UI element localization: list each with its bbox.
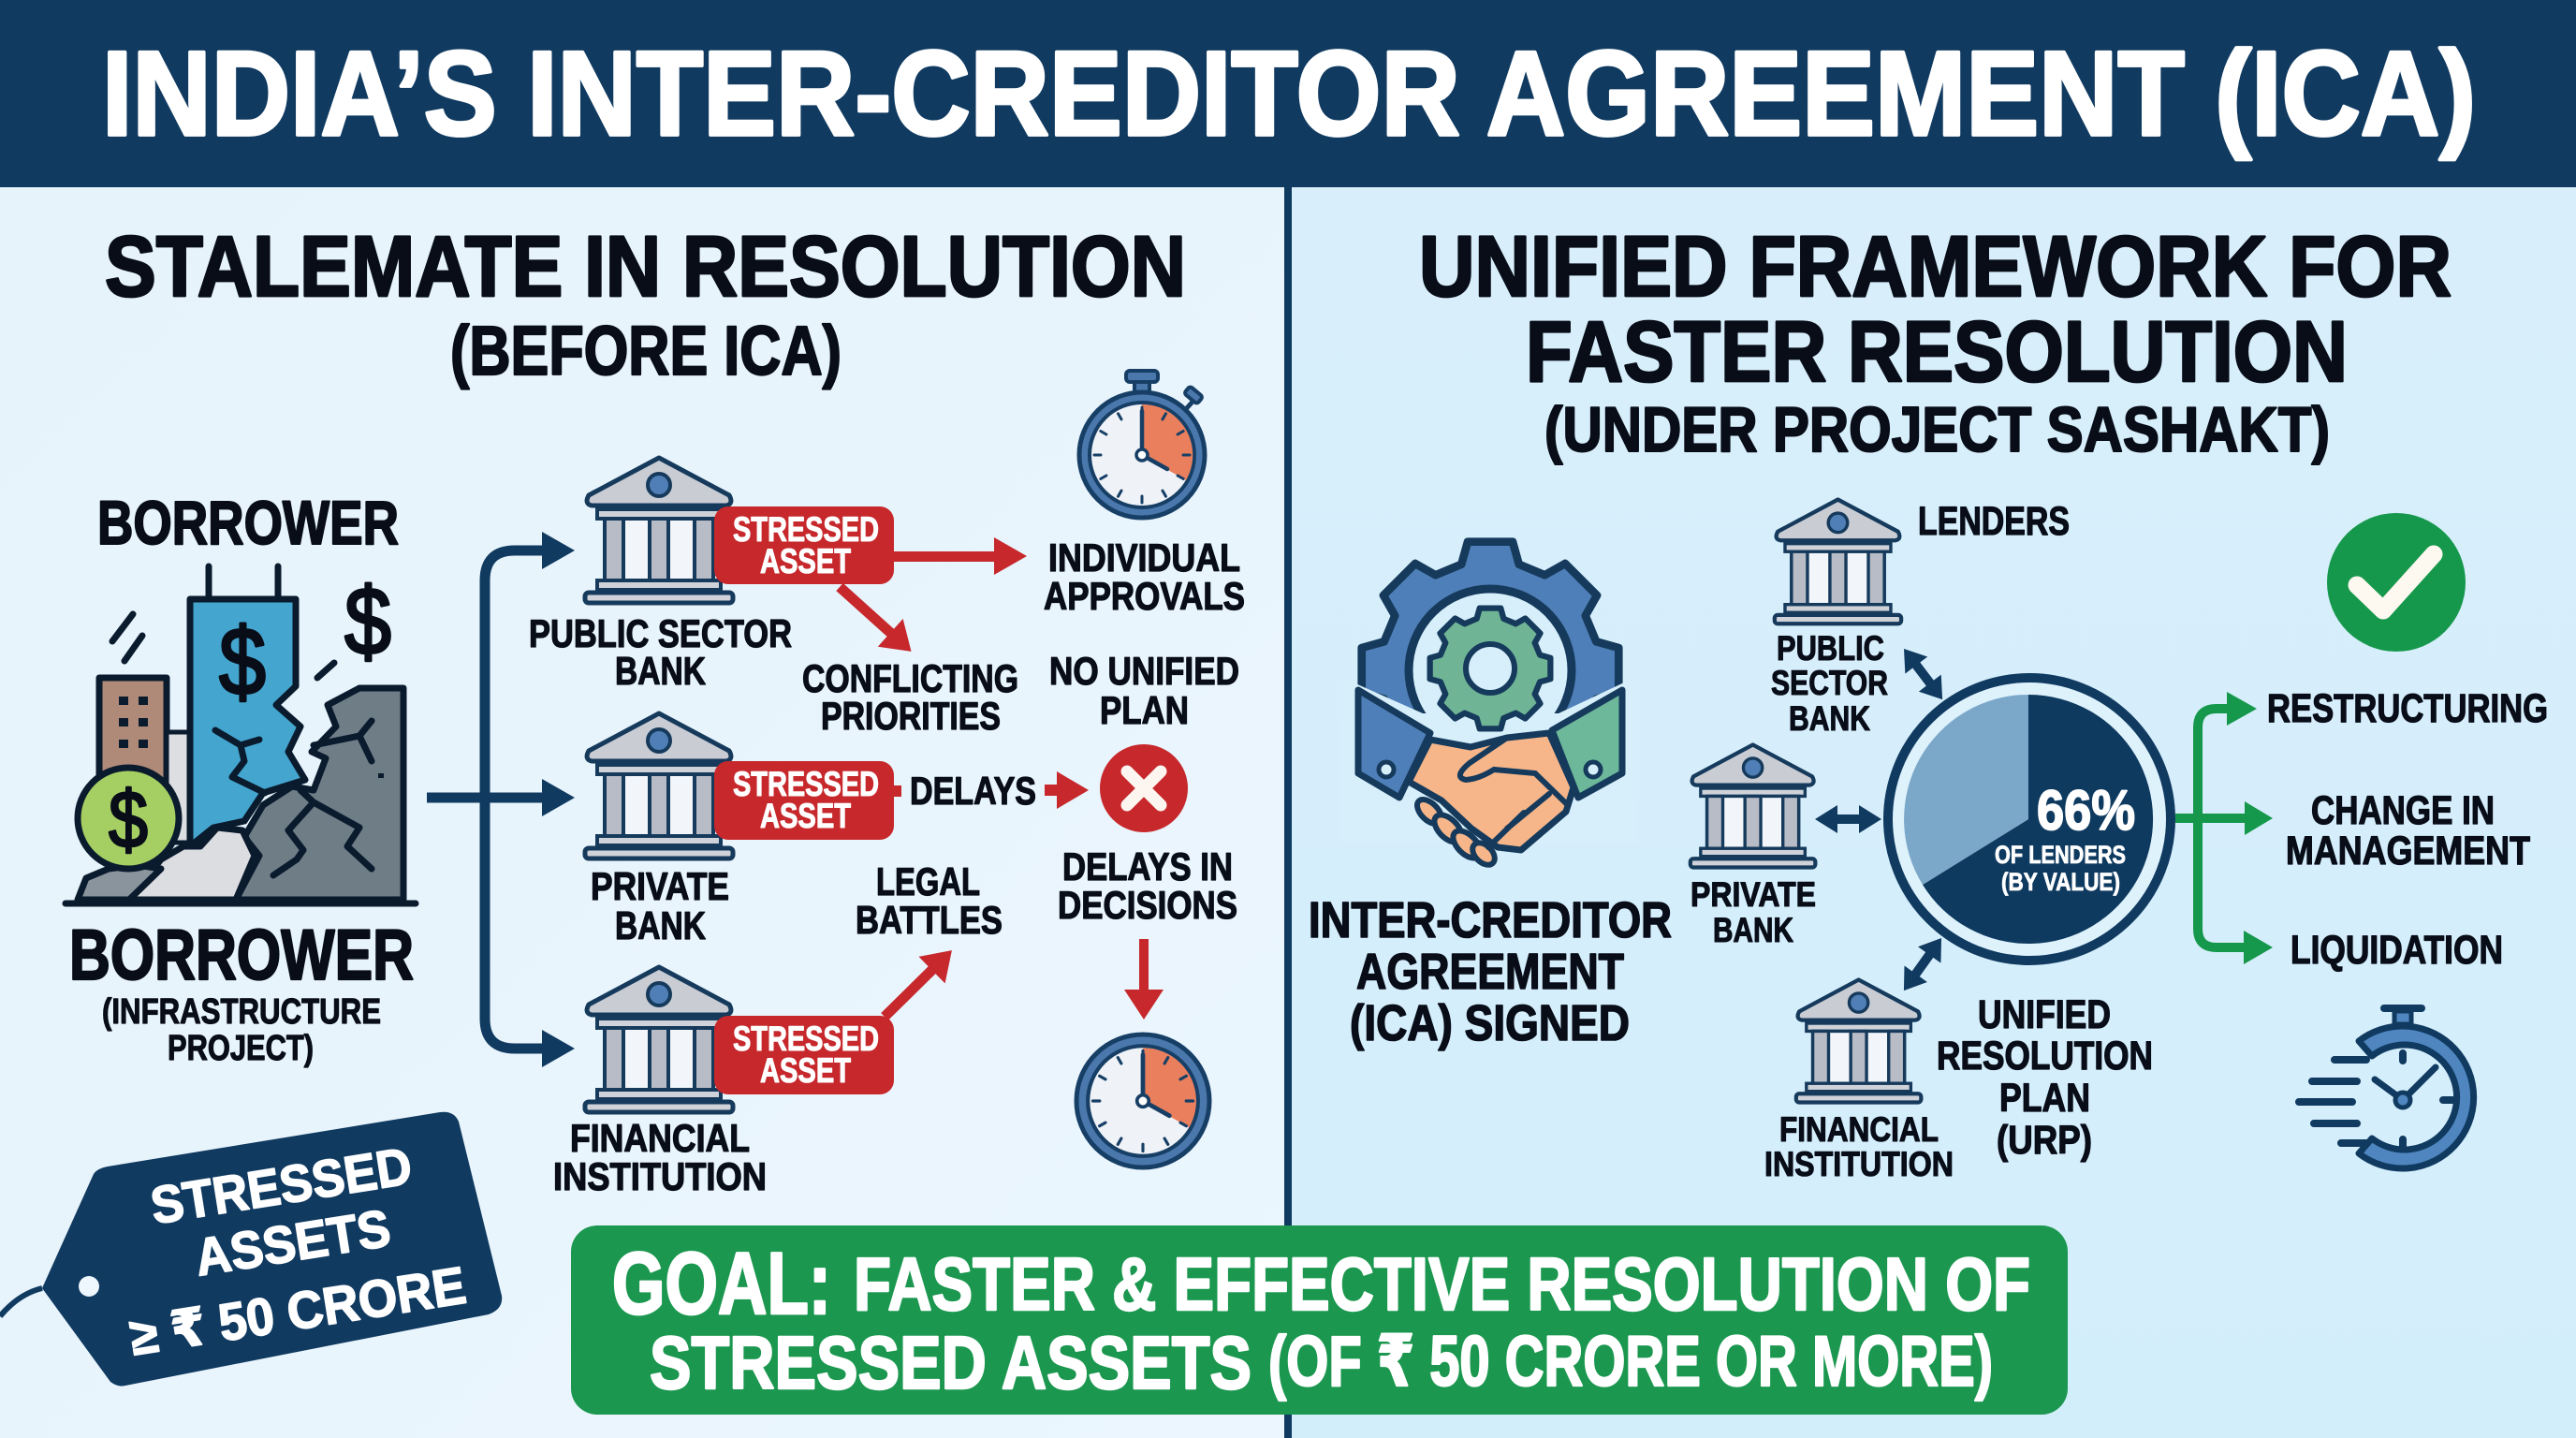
label: ICA signed: INTER-CREDITOR [1309, 892, 1672, 948]
label: individual approvals: INDIVIDUAL [1048, 536, 1240, 580]
arrow: to legal battles [871, 937, 965, 1030]
label: private bank: BANK [615, 903, 706, 947]
icon: fast stopwatch [2299, 1008, 2474, 1168]
label: conflicting priorities: PRIORITIES [821, 694, 1001, 738]
borrower label bottom: BORROWER [69, 916, 414, 995]
icon: red cross [1100, 744, 1188, 832]
label: lenders: LENDERS [1918, 499, 2070, 544]
borrower label bottom [69, 916, 414, 1068]
panel: right background (under Project Sashakt) [1288, 187, 2576, 1438]
icon: floating dollar: $ [344, 568, 391, 675]
icon: clock bottom [1076, 1034, 1209, 1167]
icon: crumbling borrower building [66, 566, 416, 903]
label: change in management: CHANGE IN [2311, 788, 2495, 833]
label: individual approvals: APPROVALS [1044, 574, 1245, 618]
badge: stressed asset 1: STRESSED [733, 510, 879, 549]
label: unified resolution plan: RESOLUTION [1937, 1034, 2153, 1078]
label: unified resolution plan: (URP) [1997, 1118, 2092, 1163]
arrow: to conflicting priorities [827, 573, 924, 666]
label: financial institution [553, 1116, 767, 1198]
badge: stressed asset 3: STRESSED [733, 1020, 879, 1058]
label: ICA signed: AGREEMENT [1356, 944, 1624, 1000]
arrow: public bank to pie [1893, 640, 1954, 708]
arrow: private bank to pie [1815, 805, 1881, 833]
goal banner: GOAL: [612, 1234, 831, 1332]
bank: public sector bank [585, 458, 733, 603]
label: delays in decisions: DELAYS IN [1062, 844, 1233, 888]
label: unified resolution plan: PLAN [1999, 1076, 2090, 1121]
left heading [105, 219, 1186, 389]
label: public sector bank [1771, 629, 1888, 738]
header banner [0, 0, 2576, 187]
label: financial institution: FINANCIAL [1779, 1110, 1939, 1149]
right heading: FASTER RESOLUTION [1526, 304, 2348, 400]
chart: 66% of lenders pie: OF LENDERS [1995, 841, 2126, 869]
label: unified resolution plan [1937, 992, 2153, 1163]
goal banner [571, 1225, 2068, 1415]
right heading [1419, 219, 2452, 465]
badge: stressed asset 2: ASSET [760, 797, 851, 835]
label: no unified plan: NO UNIFIED [1049, 649, 1239, 693]
label: public sector bank: PUBLIC [1777, 629, 1884, 668]
arrow: to individual approvals [894, 537, 1027, 575]
arrow: delays to cross [894, 771, 1089, 809]
arrows: borrower to lenders [427, 532, 575, 1067]
tag: stressed assets threshold: ≥ ₹ 50 CRORE [125, 1255, 470, 1367]
chart: 66% of lenders pie: (BY VALUE) [2001, 868, 2120, 896]
label: private bank: PRIVATE [1690, 875, 1816, 914]
bank: lender private [1690, 745, 1815, 868]
goal banner: (OF ₹ 50 CRORE OR MORE) [1268, 1322, 1993, 1401]
left heading: STALEMATE IN RESOLUTION [105, 219, 1186, 315]
label: change in management [2286, 788, 2530, 873]
label: public sector bank: SECTOR [1771, 664, 1888, 702]
goal banner: FASTER & EFFECTIVE RESOLUTION OF [854, 1242, 2030, 1326]
label: no unified plan: PLAN [1100, 688, 1189, 732]
goal banner: STRESSED ASSETS [650, 1321, 1251, 1404]
label: financial institution [1764, 1110, 1954, 1183]
arrow: financial institution to pie [1893, 930, 1953, 999]
borrower label top: BORROWER [97, 488, 399, 557]
label: public sector bank [529, 611, 792, 693]
label: public sector bank: BANK [615, 649, 706, 693]
icon: dollar on building: $ [219, 609, 266, 715]
label: financial institution: INSTITUTION [553, 1154, 767, 1198]
icon: dollar coin: $ [109, 775, 148, 865]
label: no unified plan [1049, 649, 1239, 732]
bank: private bank [585, 713, 733, 858]
left heading: (BEFORE ICA) [450, 312, 842, 389]
label: public sector bank: PUBLIC SECTOR [529, 611, 792, 655]
badge: stressed asset 3 [714, 1016, 894, 1094]
label: private bank [591, 864, 729, 947]
icon: stopwatch top [1079, 371, 1205, 518]
tag: stressed assets threshold [0, 1112, 502, 1386]
badge: stressed asset 2: STRESSED [733, 765, 879, 803]
label: financial institution: FINANCIAL [570, 1116, 750, 1160]
tag: stressed assets threshold: ASSETS [191, 1198, 394, 1287]
borrower label bottom: (INFRASTRUCTURE [102, 992, 381, 1032]
right heading: (UNDER PROJECT SASHAKT) [1544, 394, 2330, 465]
badge: stressed asset 2 [714, 761, 894, 840]
label: financial institution: INSTITUTION [1764, 1145, 1954, 1183]
label: legal battles: BATTLES [856, 898, 1003, 942]
badge: stressed asset 1: ASSET [760, 542, 851, 580]
panel: left background (before ICA) [0, 187, 1288, 1438]
label: ICA signed [1309, 892, 1672, 1051]
bank: financial institution [585, 967, 733, 1112]
tag: stressed assets threshold: STRESSED [147, 1136, 416, 1235]
label: private bank: BANK [1713, 911, 1793, 949]
label: unified resolution plan: UNIFIED [1978, 992, 2111, 1037]
label: delays: DELAYS [910, 769, 1036, 813]
label: liquidation: LIQUIDATION [2291, 928, 2503, 973]
label: conflicting priorities [802, 656, 1018, 738]
arrow: delays in decisions down [1124, 939, 1164, 1020]
arrows: outcomes [2175, 692, 2273, 964]
bank: lender financial [1796, 980, 1921, 1103]
bank: lender public [1775, 500, 1901, 624]
badge: stressed asset 3: ASSET [760, 1051, 851, 1090]
chart: 66% of lenders pie: 66% [2037, 779, 2135, 842]
icon: handshake and gears [1339, 542, 1638, 869]
label: private bank: PRIVATE [591, 864, 729, 908]
label: delays in decisions: DECISIONS [1058, 883, 1237, 927]
icon: green check [2327, 513, 2466, 652]
label: legal battles [856, 859, 1003, 942]
right heading: UNIFIED FRAMEWORK FOR [1419, 219, 2452, 315]
chart: 66% of lenders pie [1888, 678, 2171, 961]
label: delays in decisions [1058, 844, 1237, 927]
label: legal battles: LEGAL [876, 859, 980, 903]
label: conflicting priorities: CONFLICTING [802, 656, 1018, 700]
label: ICA signed: (ICA) SIGNED [1350, 995, 1630, 1051]
borrower label bottom: PROJECT) [168, 1029, 314, 1068]
label: public sector bank: BANK [1789, 699, 1870, 738]
label: change in management: MANAGEMENT [2286, 829, 2530, 873]
label: individual approvals [1044, 536, 1245, 618]
badge: stressed asset 1 [714, 506, 894, 584]
label: private bank [1690, 875, 1816, 949]
